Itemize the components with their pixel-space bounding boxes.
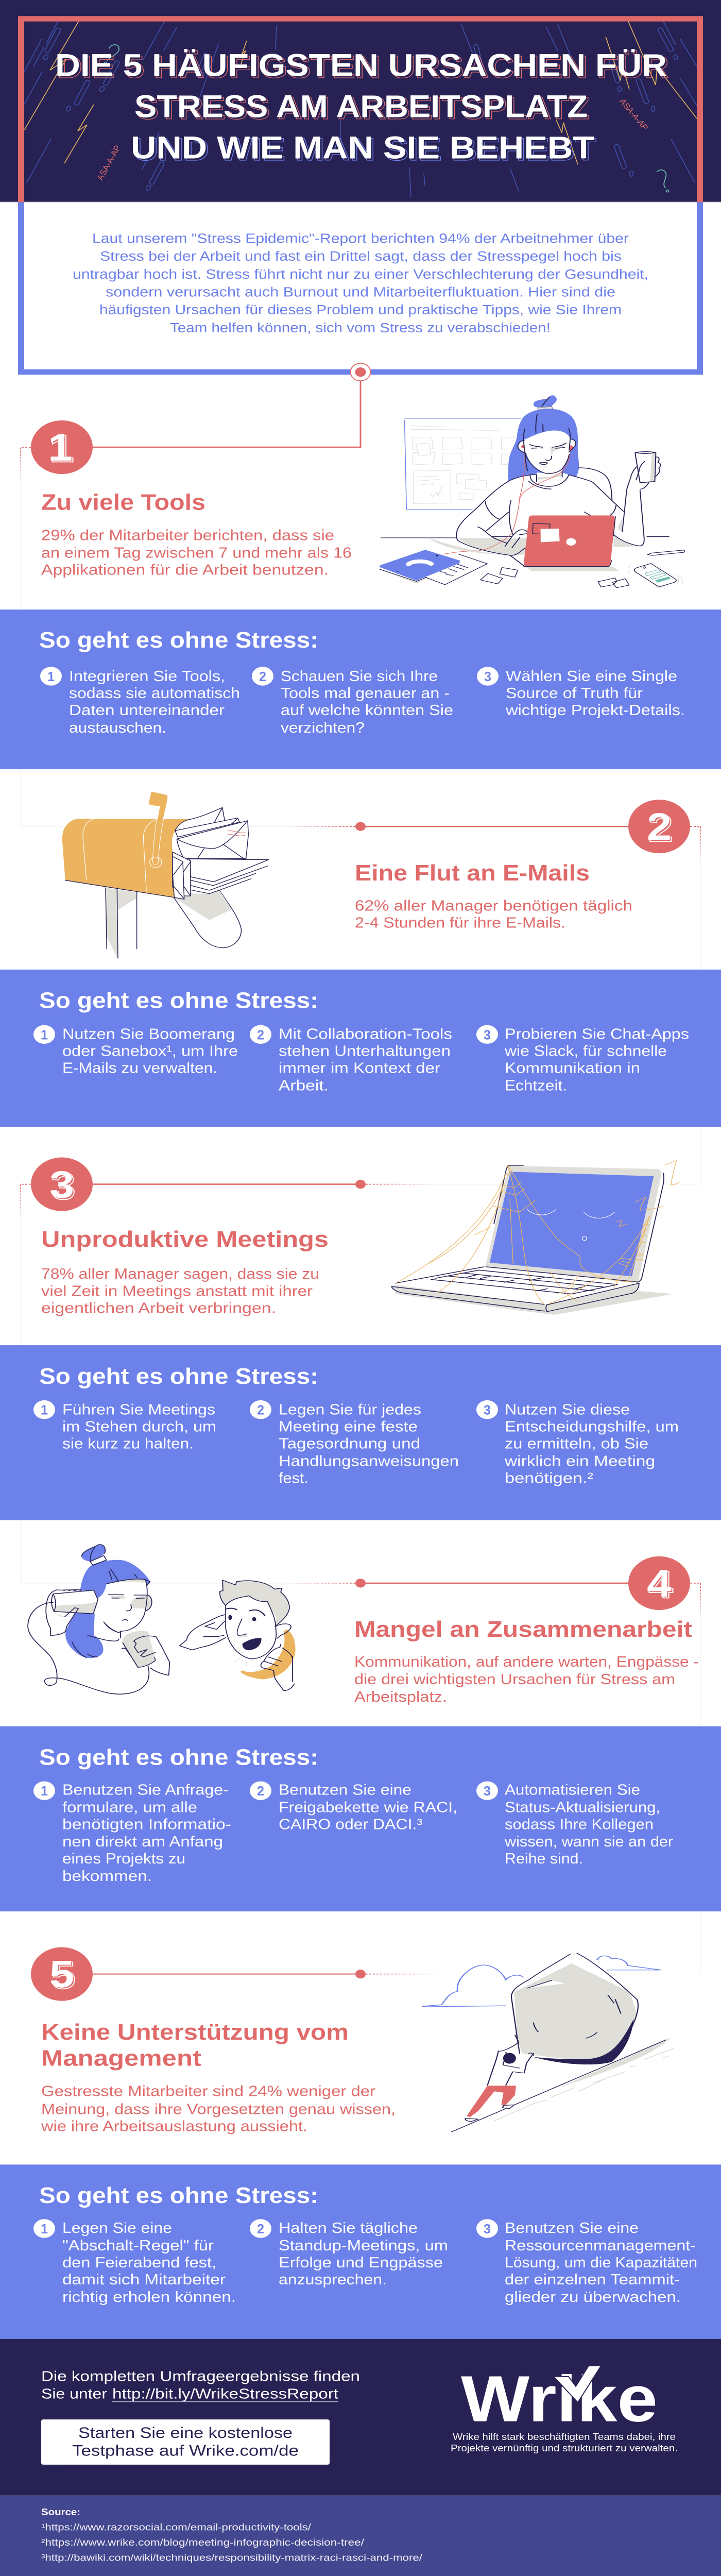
heading: Zu viele Tools: Zu viele Tools — [41, 490, 205, 515]
tip 3: 3 — [484, 669, 491, 684]
section 3: unproductive meetings — [31, 1158, 680, 1316]
badge 1: 1 — [48, 426, 73, 469]
source links — [41, 2522, 423, 2563]
tip 2: Tagesordnung und — [279, 1435, 420, 1452]
tip 1 — [33, 1025, 238, 1076]
tip 2 — [250, 1781, 457, 1833]
heading: Mangel an Zusammenarbeit: Mangel an Zusammenarbeit — [354, 1617, 692, 1641]
tip 3: benötigen.² — [505, 1470, 593, 1486]
text: section 5 statistic — [41, 2083, 396, 2134]
tip 2: auf welche könnten Sie — [281, 702, 453, 719]
tip 3: Kommunikation in — [505, 1060, 640, 1076]
title: STRESS AM ARBEITSPLATZ — [134, 89, 588, 124]
tip 2: fest. — [279, 1470, 308, 1486]
tip 2: Benutzen Sie eine — [279, 1782, 411, 1798]
text: section 5 statistic: Meinung, dass ihre Vorgesetzten genau wissen, — [41, 2100, 396, 2117]
tip 2: Freigabekette wie RACI, — [279, 1799, 457, 1816]
heading: Keine Unterstützung vom Management: Keine Unterstützung vom — [41, 2020, 349, 2044]
tip 1: austauschen. — [69, 719, 166, 736]
tip 1: nen direkt am Anfang — [62, 1833, 223, 1850]
tip 1 — [33, 1781, 231, 1885]
badge 4: 4 — [647, 1562, 672, 1605]
badge 5: 5 — [49, 1953, 74, 1996]
text: section 4 statistic — [354, 1653, 699, 1705]
tip 2: 2 — [257, 1784, 264, 1799]
illustration: person pushing boulder uphill — [422, 1953, 674, 2132]
Wrike tagline — [451, 2432, 678, 2453]
header panel: ASA-A-AP — [617, 97, 649, 132]
heading: So geht es ohne Stress: — [39, 628, 318, 652]
tip 2: 2 — [257, 1027, 264, 1042]
title: DIE 5 HÄUFIGSTEN URSACHEN FÜR — [57, 49, 669, 84]
tip 3: zu ermitteln, ob Sie — [505, 1435, 648, 1452]
text: section 4 statistic: Arbeitsplatz. — [354, 1688, 447, 1705]
title frame: red upper part — [18, 16, 703, 202]
man — [220, 1580, 289, 1626]
tip 3: wirklich ein Meeting — [504, 1453, 655, 1469]
text: section 3 statistic — [41, 1265, 319, 1316]
tip 2 — [250, 1025, 452, 1094]
illustration: sleeping laptop with cobwebs — [391, 1161, 680, 1315]
intro text: sondern verursacht auch Burnout und Mitarbeiterfluktuation. Hier sind die — [106, 284, 615, 299]
connector section 5 — [93, 1911, 700, 1978]
box — [62, 819, 191, 897]
tip 1 — [33, 2219, 236, 2305]
tips panel 3 — [0, 1345, 721, 1520]
tips panel 1 — [0, 609, 721, 769]
intro text: Stress bei der Arbeit und fast ein Drittel sagt, dass der Stresspegel hoch bis — [100, 249, 622, 264]
document under tablet — [425, 554, 487, 585]
tip 3: Benutzen Sie eine — [505, 2219, 639, 2236]
tip 1: eines Projekts zu — [62, 1850, 185, 1867]
tip 2: 2 — [259, 669, 266, 684]
background pattern: rain, lightning, question marks — [24, 21, 697, 197]
title: STRESS AM ARBEITSPLATZ — [136, 91, 590, 126]
tip 1: Nutzen Sie Boomerang — [62, 1026, 235, 1042]
tip 1: E-Mails zu verwalten. — [62, 1060, 217, 1076]
intro text: Team helfen können, sich vom Stress zu verabschieden! — [170, 320, 551, 335]
tip 3: sodass Ihre Kollegen — [505, 1816, 654, 1833]
table shadow — [429, 538, 526, 555]
tip 1: damit sich Mitarbeiter — [62, 2271, 226, 2288]
tip 1: "Abschalt-Regel" für — [62, 2237, 214, 2254]
tip 2 — [250, 2219, 448, 2288]
text: section 3 statistic: viel Zeit in Meetings anstatt mit ihrer — [41, 1283, 313, 1299]
text: section 1 statistic: Applikationen für die Arbeit benutzen. — [41, 561, 329, 578]
tips panel 2 — [0, 970, 721, 1127]
section 1: too many tools — [31, 395, 684, 588]
tip 3: Source of Truth für — [506, 685, 643, 702]
report link text: http://bit.ly/WrikeStressReport — [112, 2386, 339, 2402]
earphone wire — [443, 452, 570, 554]
tip 1: 1 — [41, 1027, 48, 1042]
section 2: flood of emails — [62, 791, 690, 958]
text: section 5 statistic: Gestresste Mitarbeiter sind 24% weniger der — [41, 2083, 375, 2099]
intro text — [73, 231, 648, 335]
text: section 5 statistic: wie ihre Arbeitsauslastung aussieht. — [41, 2117, 307, 2134]
tip 1: den Feierabend fest, — [62, 2254, 216, 2271]
Wrike tagline: Wrike hilft stark beschäftigten Teams dabei, ihre — [453, 2432, 676, 2443]
report link text: Die kompletten Umfrageergebnisse finden — [41, 2368, 360, 2384]
intro frame: blue lower part — [18, 202, 703, 375]
badge 5: 5 — [51, 1954, 76, 1997]
report link text: Sie unter — [41, 2386, 107, 2402]
woman — [82, 1545, 105, 1562]
tip 1: 1 — [47, 669, 55, 684]
tip 2: Meeting eine feste — [279, 1418, 418, 1435]
tip 3: Automatisieren Sie — [505, 1782, 640, 1798]
illustration: two people with tin-can phones — [28, 1545, 296, 1694]
Wrike logo: Wrike — [461, 2362, 658, 2435]
badge 3: 3 — [49, 1163, 74, 1206]
tip 3: 3 — [484, 1027, 491, 1042]
tip 1: sie kurz zu halten. — [62, 1435, 194, 1452]
tip 2: verzichten? — [281, 719, 365, 736]
tip 3: Probieren Sie Chat-Apps — [505, 1026, 689, 1042]
tip 1: 1 — [41, 2222, 48, 2236]
heading: Eine Flut an E-Mails: Eine Flut an E-Mails — [355, 860, 590, 885]
tip 2: Schauen Sie sich Ihre — [281, 668, 438, 685]
heading: So geht es ohne Stress: — [39, 1744, 318, 1770]
laptop lid — [524, 516, 615, 567]
tip 3: 3 — [484, 1784, 491, 1799]
call-to-action button — [41, 2419, 330, 2465]
tip 3 — [476, 1781, 673, 1867]
section 5: no management support — [31, 1947, 674, 2134]
report link text — [41, 2368, 360, 2402]
source links: ²https://www.wrike.com/blog/meeting-infographic-decision-tree/ — [41, 2537, 365, 2548]
tip 1: Legen Sie eine — [62, 2219, 172, 2236]
tip 3: Nutzen Sie diese — [505, 1401, 630, 1418]
illustration: stressed woman at laptop — [380, 395, 684, 588]
tip 1: oder Sanebox¹, um Ihre — [62, 1043, 238, 1059]
text: section 1 statistic — [41, 527, 352, 578]
tablet — [380, 569, 427, 584]
tip 2: Halten Sie tägliche — [279, 2219, 418, 2236]
tip 3: Wählen Sie eine Single — [506, 668, 677, 685]
tip 2: 2 — [257, 1402, 264, 1417]
tip 1: Integrieren Sie Tools, — [69, 668, 225, 685]
tip 2: immer im Kontext der — [279, 1060, 440, 1076]
badge 2: 2 — [648, 807, 673, 850]
head — [524, 431, 571, 473]
call-to-action button: Testphase auf Wrike.com/de — [72, 2442, 299, 2459]
badge 1: 1 — [49, 428, 74, 470]
intro text: Laut unserem "Stress Epidemic"-Report berichten 94% der Arbeitnehmer über — [92, 231, 629, 246]
tip 1: Benutzen Sie Anfrage- — [62, 1782, 229, 1798]
tip 2: Erfolge und Engpässe — [279, 2254, 443, 2271]
tip 2: Standup-Meetings, um — [279, 2237, 448, 2254]
tip 3: wichtige Projekt-Details. — [505, 702, 685, 719]
tip 3: Reihe sind. — [505, 1850, 583, 1867]
header panel: ASA-A-AP — [96, 144, 123, 181]
badge 4 — [628, 1556, 690, 1610]
title: UND WIE MAN SIE BEHEBT — [133, 132, 596, 167]
tips panel 4 — [0, 1726, 721, 1911]
text: section 1 statistic: 29% der Mitarbeiter berichten, dass sie — [41, 527, 334, 544]
tip 3: wissen, wann sie an der — [504, 1833, 673, 1850]
tip 3: glieder zu überwachen. — [505, 2289, 681, 2305]
badge 2 — [628, 800, 690, 853]
tip 3: Ressourcenmanagement- — [505, 2237, 696, 2254]
footer panel — [0, 2339, 721, 2496]
cup — [635, 452, 656, 483]
tip 1: richtig erholen können. — [62, 2289, 236, 2305]
text: section 1 statistic: an einem Tag zwischen 7 und mehr als 16 — [41, 545, 352, 561]
pencil — [647, 550, 684, 555]
text: section 2 statistic: 62% aller Manager benötigen täglich — [355, 897, 632, 914]
tip 1: 1 — [41, 1402, 48, 1417]
text: section 4 statistic: Kommunikation, auf andere warten, Engpässe - — [354, 1653, 699, 1670]
connector section 2 — [21, 769, 700, 970]
intro text: untragbar hoch ist. Stress führt nicht nur zu einer Verschlechterung der Gesundheit, — [73, 267, 648, 281]
badge 1 — [31, 420, 93, 474]
tips panel 5 — [0, 2164, 721, 2339]
tip 3: Lösung, um die Kapazitäten — [505, 2254, 697, 2271]
tip 2: 2 — [257, 2222, 264, 2236]
text: section 3 statistic: 78% aller Manager sagen, dass sie zu — [41, 1265, 319, 1282]
tip 2 — [252, 667, 453, 736]
heading: So geht es ohne Stress: — [39, 1364, 318, 1388]
tip 3 — [476, 1025, 689, 1094]
door — [174, 891, 241, 948]
tip 3: 3 — [484, 2222, 491, 2236]
tip 2 — [250, 1400, 459, 1486]
envelopes — [173, 807, 269, 899]
tip 1 — [33, 1400, 216, 1452]
text: section 4 statistic: die drei wichtigsten Ursachen für Stress am — [354, 1671, 675, 1688]
hair — [534, 395, 557, 408]
tip 1 — [40, 667, 240, 736]
tip 2: stehen Unterhaltungen — [279, 1043, 451, 1059]
tip 1: sodass sie automatisch — [69, 685, 240, 702]
badge 5 — [31, 1947, 93, 2001]
text: section 3 statistic: eigentlichen Arbeit verbringen. — [41, 1300, 276, 1316]
section 4: lack of collaboration — [28, 1545, 699, 1705]
tip 1: Daten untereinander — [69, 702, 225, 719]
sources panel — [0, 2496, 721, 2576]
sticky notes — [480, 568, 629, 588]
sources heading: Source: — [41, 2507, 80, 2518]
connector section 4 — [21, 1520, 700, 1726]
tip 2: Tools mal genauer an - — [281, 685, 450, 702]
text: section 2 statistic: 2-4 Stunden für ihre E-Mails. — [355, 914, 565, 931]
intro text: häufigsten Ursachen für dieses Problem und praktische Tipps, wie Sie Ihrem — [99, 302, 622, 317]
tip 1: benötigten Informatio- — [62, 1816, 231, 1833]
tip 1: im Stehen durch, um — [62, 1418, 216, 1435]
tip 2: Handlungsanweisungen — [279, 1453, 459, 1469]
title: UND WIE MAN SIE BEHEBT — [131, 130, 594, 165]
badge 2: 2 — [647, 805, 672, 849]
title: DIE 5 HÄUFIGSTEN URSACHEN FÜR — [55, 48, 667, 83]
heading: Keine Unterstützung vom Management: Management — [41, 2046, 201, 2071]
tip 3 — [477, 667, 685, 719]
flag — [149, 791, 167, 864]
tip 1: formulare, um alle — [62, 1799, 197, 1816]
heading: So geht es ohne Stress: — [39, 988, 318, 1013]
tip 3 — [476, 1400, 679, 1486]
text: section 2 statistic — [355, 897, 632, 931]
badge 4: 4 — [648, 1564, 673, 1606]
source links: ³http://bawiki.com/wiki/techniques/responsibility-matrix-raci-rasci-and-more/ — [41, 2553, 423, 2563]
header panel — [0, 0, 721, 202]
body — [456, 472, 623, 555]
tip 2: CAIRO oder DACI.³ — [279, 1816, 422, 1833]
title — [55, 48, 669, 167]
Wrike tagline: Projekte vernünftig und strukturiert zu verwalten. — [451, 2443, 678, 2453]
call-to-action button: Starten Sie eine kostenlose — [78, 2424, 293, 2441]
tip 3: Status-Aktualisierung, — [505, 1799, 660, 1816]
tip 1: 1 — [41, 1784, 48, 1799]
tip 3: Entscheidungshilfe, um — [505, 1418, 679, 1435]
badge 3 — [31, 1158, 93, 1211]
tip 2: Mit Collaboration-Tools — [279, 1026, 452, 1042]
tip 1: bekommen. — [62, 1868, 152, 1885]
badge 3: 3 — [51, 1165, 76, 1208]
tip 3: der einzelnen Teammit- — [505, 2271, 680, 2288]
illustration: overflowing mailbox — [62, 791, 269, 958]
tip 2: Legen Sie für jedes — [279, 1401, 421, 1418]
tip 3 — [476, 2219, 697, 2305]
tip 2: anzusprechen. — [279, 2271, 387, 2288]
connector section 3 — [21, 1127, 700, 1345]
tip 3: 3 — [484, 1402, 491, 1417]
heading: Keine Unterstützung vom Management — [41, 2020, 349, 2071]
tip 2: Arbeit. — [279, 1077, 329, 1094]
smartphone — [638, 572, 677, 588]
heading: Unproduktive Meetings: Unproduktive Meetings — [41, 1227, 329, 1251]
source links: ¹https://www.razorsocial.com/email-productivity-tools/ — [41, 2522, 312, 2533]
tip 3: Echtzeit. — [505, 1077, 567, 1094]
heading: So geht es ohne Stress: — [39, 2183, 318, 2208]
tip 1: Führen Sie Meetings — [62, 1401, 215, 1418]
connector from intro to section 1 — [21, 363, 371, 609]
tip 3: wie Slack, für schnelle — [504, 1043, 667, 1059]
